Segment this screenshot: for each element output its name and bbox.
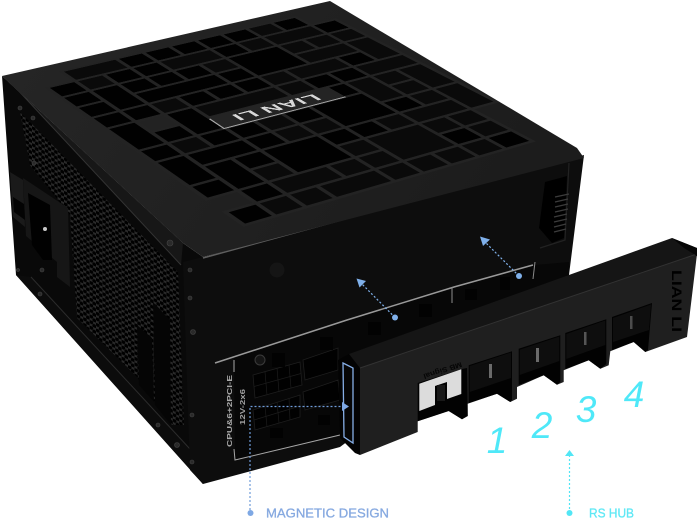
- MB signal label: MB Signal: [422, 360, 463, 379]
- top lip highlight: [203, 156, 574, 258]
- hub logo text: LIAN LI: [669, 270, 685, 332]
- hub front face: [360, 254, 697, 455]
- port numbers: 3: [576, 389, 597, 430]
- port numbers: 2: [531, 405, 553, 446]
- slot 1: [469, 351, 512, 403]
- port numbers: 4: [624, 374, 644, 415]
- port label: 12V: 12V-2x6: [238, 389, 247, 425]
- slot MB signal: [418, 368, 468, 421]
- mounting knob: [270, 262, 284, 278]
- arrow: right magnet: [480, 236, 522, 279]
- hub right tip: [672, 238, 697, 256]
- slot 2: [519, 335, 560, 385]
- connector ports: [253, 348, 340, 430]
- bay lip line: [215, 265, 533, 363]
- front panel: [203, 155, 584, 484]
- hub end face: [338, 354, 362, 455]
- slot 4: [612, 303, 652, 352]
- magnetic strip highlight: [343, 363, 353, 443]
- honeycomb vent: [20, 112, 184, 425]
- corner strip: [183, 257, 203, 484]
- lower connector bay: [234, 262, 569, 460]
- bottom flange: [16, 275, 203, 484]
- logo plate: [207, 87, 346, 129]
- label: magnetic design: MAGNETIC DESIGN: [266, 506, 389, 520]
- port screw: [255, 355, 265, 365]
- side connector comb: [539, 163, 569, 248]
- power socket: [23, 178, 70, 287]
- arrow: RS hub: [565, 450, 574, 516]
- port pin grid: [254, 365, 301, 427]
- side screws: [16, 106, 196, 464]
- RS hub: [338, 238, 697, 455]
- top face: [2, 1, 584, 257]
- port label: CPU: CPU&6+2PCI-E: [225, 375, 234, 447]
- arrow: left magnet: [356, 278, 398, 320]
- logo text: LIAN LI: [217, 90, 316, 116]
- vent blocks: [137, 302, 171, 425]
- port numbers: 1: [487, 420, 507, 461]
- top grille with logo plate: [50, 18, 529, 224]
- arrow: magnetic design: [248, 402, 349, 516]
- port numbers: [487, 374, 644, 461]
- grille holes: [33, 11, 559, 225]
- power switch: [10, 172, 25, 227]
- left side face: [2, 76, 203, 484]
- hub top face: [349, 238, 697, 368]
- label frame: [233, 360, 235, 372]
- slot 3: [565, 319, 606, 369]
- side fold band: [2, 76, 183, 265]
- label: RS hub: RS HUB: [589, 506, 634, 520]
- port notches: [270, 277, 510, 438]
